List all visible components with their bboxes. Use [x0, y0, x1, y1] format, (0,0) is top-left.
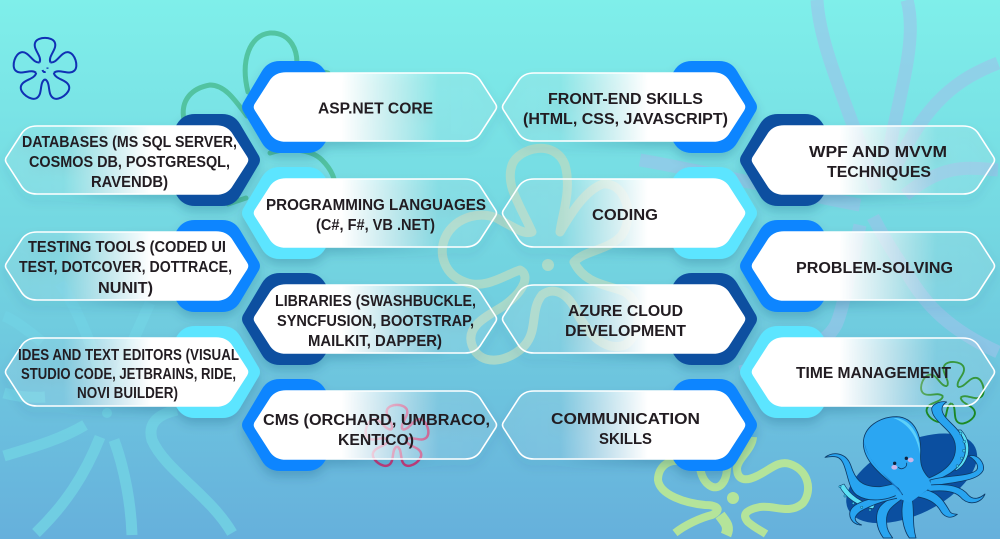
panel: Programming languages: [242, 167, 496, 259]
label: PROBLEM-SOLVING: [796, 260, 953, 277]
label: TEST, DOTCOVER, DOTTRACE,: [19, 259, 232, 276]
label: MAILKIT, DAPPER): [308, 333, 442, 350]
label: SYNCFUSION, BOOTSTRAP,: [277, 313, 474, 330]
panel: Problem-solving: [740, 220, 994, 312]
label: [565, 303, 686, 340]
label: [523, 91, 728, 128]
decoration: small green flower: [916, 360, 988, 428]
label: ASP.NET CORE: [318, 100, 433, 118]
octopus backdrop ellipse: [832, 415, 991, 539]
head shading: [864, 442, 903, 495]
label: LIBRARIES (SWASHBUCKLE,: [275, 293, 476, 310]
hexagon backing: [242, 61, 345, 153]
hexagon card: [254, 391, 496, 459]
head outline: [863, 417, 928, 495]
panel: Databases: [6, 114, 260, 206]
label: TIME MANAGEMENT: [796, 365, 951, 382]
hexagon card: [752, 126, 994, 194]
label: [551, 411, 700, 448]
label: CMS (ORCHARD, UMBRACO,: [263, 412, 490, 429]
hexagon backing: [157, 326, 260, 418]
label: SKILLS: [599, 431, 652, 448]
hexagon card: [502, 391, 744, 459]
hexagon card: [502, 73, 744, 141]
decoration: lavender flower: [640, 0, 998, 372]
icon: octopus: [825, 402, 991, 539]
decoration: pink flower: [363, 405, 431, 469]
panel: Time management: [740, 326, 994, 418]
label: RAVENDB): [91, 174, 168, 191]
label: (HTML, CSS, JAVASCRIPT): [523, 111, 728, 128]
hexagon backing: [740, 220, 843, 312]
hexagon card: [254, 285, 496, 353]
label: [263, 412, 490, 449]
panel: WPF and MVVM: [740, 114, 994, 206]
label: TESTING TOOLS (CODED UI: [28, 239, 226, 256]
decoration: yellow-green flower centre: [727, 492, 739, 504]
label: PROGRAMMING LANGUAGES: [266, 197, 486, 214]
decoration: pale flower: [442, 148, 638, 360]
label: IDES AND TEXT EDITORS (VISUAL: [18, 347, 239, 364]
label: COSMOS DB, POSTGRESQL,: [29, 154, 230, 171]
octopus head and body: [863, 417, 932, 503]
label: [275, 293, 476, 350]
label: [809, 144, 947, 181]
label: FRONT-END SKILLS: [548, 91, 703, 108]
panel: IDEs and text editors: [6, 326, 260, 418]
decoration: pale flower centre: [542, 259, 554, 271]
label: DEVELOPMENT: [565, 323, 686, 340]
hexagon card: [6, 126, 248, 194]
icon: blue flower: [11, 38, 79, 102]
hexagon card: [502, 179, 744, 247]
suckers: [839, 432, 966, 511]
hexagon card: [6, 338, 248, 406]
hexagon backing: [654, 61, 757, 153]
panel: ASP.NET Core: [242, 61, 496, 153]
label: WPF AND MVVM: [809, 144, 947, 161]
label: (C#, F#, VB .NET): [316, 217, 435, 234]
hexagon backing: [242, 167, 345, 259]
hexagon card: [254, 73, 496, 141]
sucker bands: [839, 430, 969, 509]
label: KENTICO): [338, 432, 414, 449]
hexagon backing: [740, 114, 843, 206]
head highlight: [893, 418, 920, 454]
panel: Coding: [502, 167, 757, 259]
hexagon backing: [242, 379, 345, 471]
panel: Testing tools: [6, 220, 260, 312]
label: TECHNIQUES: [827, 164, 931, 181]
hexagon card: [6, 232, 248, 300]
panel: Communication skills: [502, 379, 757, 471]
label: NUNIT): [98, 280, 153, 297]
label: [266, 197, 486, 234]
panel: CMS: [242, 379, 496, 471]
label: AZURE CLOUD: [568, 303, 683, 320]
hexagon backing: [740, 326, 843, 418]
label: DATABASES (MS SQL SERVER,: [22, 134, 237, 151]
label: [22, 134, 237, 191]
decoration: cyan flower centre: [102, 408, 112, 418]
decoration: green flower: [183, 33, 335, 204]
hexagon backing: [654, 273, 757, 365]
hexagon backing: [157, 114, 260, 206]
tentacles: [825, 402, 985, 538]
decoration: large cyan flower: [4, 283, 232, 535]
panel: Front-end skills: [502, 61, 757, 153]
label: COMMUNICATION: [551, 411, 700, 428]
panel: Libraries: [242, 273, 496, 365]
hexagon card: [752, 232, 994, 300]
panel: Azure cloud development: [502, 273, 757, 365]
label: NOVI BUILDER): [77, 385, 178, 402]
label: [18, 347, 239, 402]
label: [19, 239, 232, 297]
face: [891, 457, 914, 470]
hexagon backing: [157, 220, 260, 312]
hexagon backing: [242, 273, 345, 365]
label: CODING: [592, 207, 658, 224]
hexagon backing: [654, 379, 757, 471]
hexagon backing: [654, 167, 757, 259]
hexagon card: [502, 285, 744, 353]
decoration: yellow-green flower: [658, 437, 808, 535]
hexagon card: [752, 338, 994, 406]
hexagon card: [254, 179, 496, 247]
label: STUDIO CODE, JETBRAINS, RIDE,: [21, 366, 236, 383]
